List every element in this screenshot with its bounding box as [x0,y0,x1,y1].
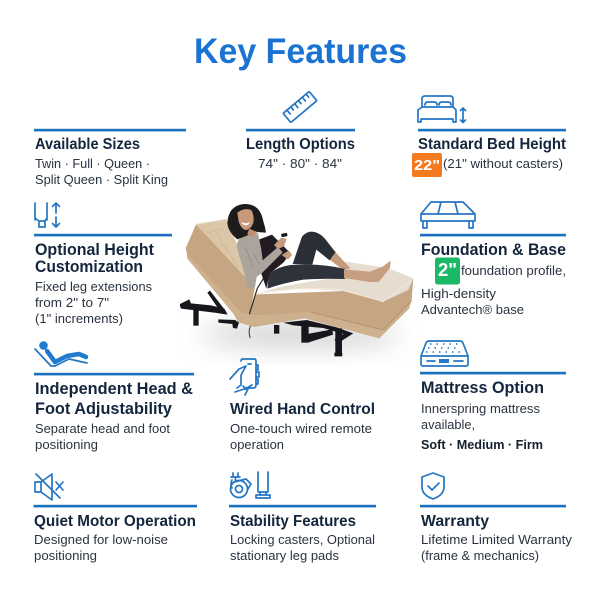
heading: foundation and base: Foundation & Base [421,240,566,259]
panel: optional height customization [34,203,172,326]
heading: optional height line 2: Customization [35,257,143,276]
text: foundation profile: foundation profile, [461,263,566,278]
woman: hair [227,204,266,239]
title: Key Features [194,32,407,71]
woman: cardigan [237,233,283,289]
text: leg extensions line 3: (1" increments) [35,311,123,326]
cord [249,324,252,338]
foot mattress side [250,278,413,330]
icon: hand holding remote [230,359,259,395]
heading: independent head line 2: Foot Adjustability [35,399,173,418]
woman: face [237,209,254,230]
heading: length options: Length Options [246,136,355,153]
heading: available sizes: Available Sizes [35,136,140,153]
text: size list line 1: Twin · Full · Queen · [35,156,150,171]
text: without casters: (21" without casters) [443,156,563,171]
text: leg extensions line 1: Fixed leg extensions [35,279,152,294]
text: casters line 1: Locking casters, Optional [230,532,375,547]
frame: black base and legs [180,291,353,356]
text: separate positioning line 1: Separate head and foot [35,421,170,436]
heading: optional height line 1: Optional Height [35,240,154,259]
head mattress side [186,224,255,314]
icon: mattress [421,341,468,366]
text: size list line 2: Split Queen · Split King [35,172,168,187]
woman: front leg [267,264,345,289]
text: separate positioning line 2: positioning [35,437,98,452]
heading: quiet motor operation: Quiet Motor Operation [34,513,196,530]
text: low noise line 2: positioning [34,548,97,563]
woman: hand and remote [274,238,292,260]
text: leg extensions line 2: from 2" to 7" [35,295,109,310]
badge: 22 inch [412,153,442,177]
panel: foundation and base [420,202,566,317]
heading: warranty: Warranty [421,513,489,530]
badge: 22 inch: 22" [414,157,440,174]
text: warranty line 1: Lifetime Limited Warranty [421,532,573,547]
text: firmness options: Soft · Medium · Firm [421,437,543,452]
badge: 2 inch: 2" [438,260,457,280]
text: lengths: 74" · 80" · 84" [258,156,342,171]
panel: wired hand control [230,359,375,452]
foot mattress top [256,262,413,302]
panel: mattress option [420,341,566,452]
heading: wired hand control: Wired Hand Control [230,401,375,418]
text: casters line 2: stationary leg pads [230,548,339,563]
text: innerspring line 2: available, [421,417,475,432]
woman: torso [259,235,290,289]
illustration: woman on adjustable bed [180,204,413,356]
icon: reclining person [35,341,87,366]
woman: shin and foot [344,261,391,282]
panel: quiet motor operation [34,474,197,563]
icon: ruler [283,91,317,123]
panel: warranty [420,473,573,563]
head mattress top [196,219,255,287]
icon: leg extension with arrows [35,203,60,227]
text: remote line 1: One-touch wired remote [230,421,372,436]
icon: caster and leg pad [230,472,270,498]
text: innerspring line 1: Innerspring mattress [421,401,540,416]
text: high-density: High-density [421,286,497,301]
heading: standard bed height: Standard Bed Height [418,136,567,153]
icon: shield with check [422,473,444,499]
text: warranty line 2: (frame & mechanics) [421,548,539,563]
panel: independent head and foot adjustability [34,341,194,452]
panel: length options [246,91,355,171]
heading: mattress option: Mattress Option [421,378,544,397]
text: low noise line 1: Designed for low-noise [34,532,168,547]
icon: muted speaker [35,474,63,500]
text: remote line 2: operation [230,437,284,452]
panel: stability features [229,472,376,563]
heading: stability features: Stability Features [230,513,356,530]
strap [249,273,267,314]
icon: bed with height arrow [418,96,466,122]
panel: available sizes [34,129,186,187]
icon: foundation [421,202,475,228]
foundation strip [187,253,412,338]
woman: back leg [293,232,336,265]
panel: standard bed height [412,96,567,177]
badge: 2 inch [435,258,460,284]
text: advantech base: Advantech® base [421,302,524,317]
heading: independent head line 1: Independent Head & [35,379,193,398]
